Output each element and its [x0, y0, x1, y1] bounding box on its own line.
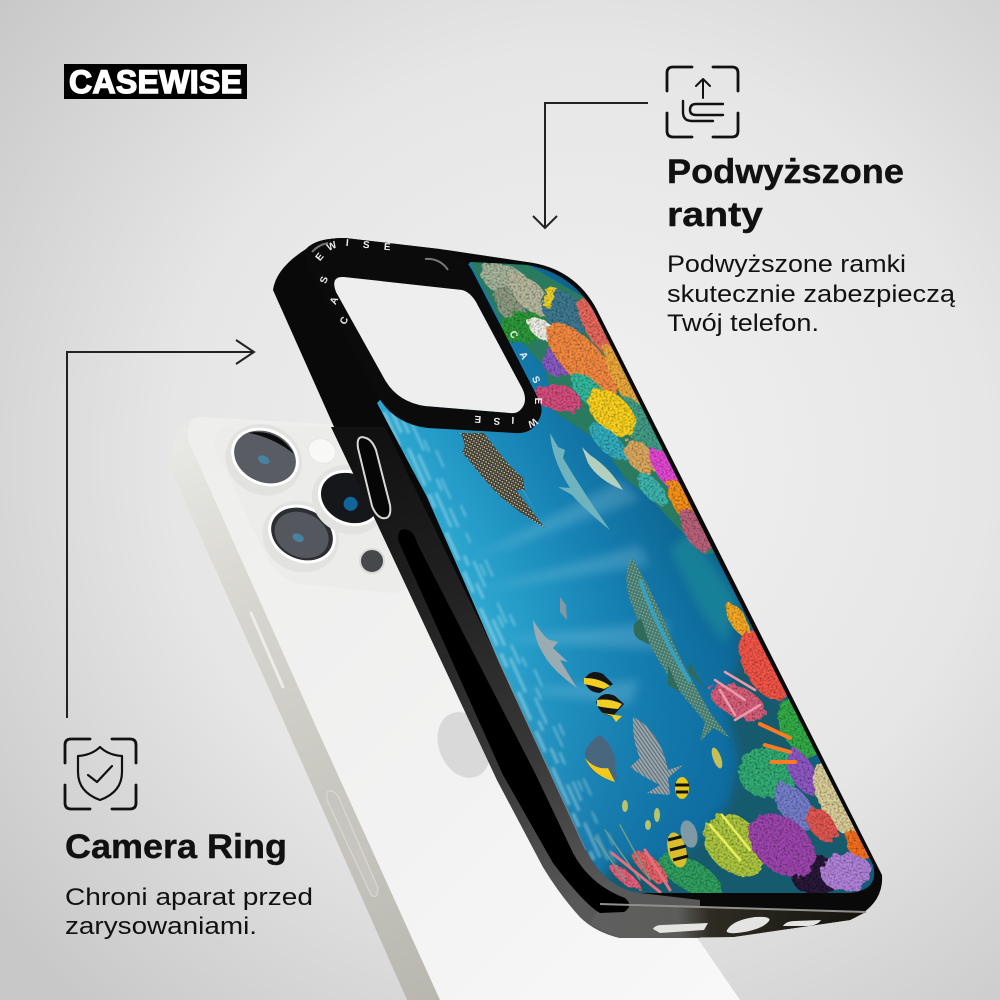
reef faint teal	[670, 530, 738, 645]
reef base band	[470, 262, 720, 555]
yellow striped fish pair	[584, 672, 624, 722]
screen ocean artwork	[377, 262, 874, 893]
side slot cut-out	[398, 529, 629, 913]
ring lettering: C	[507, 329, 520, 341]
striped grey fish	[630, 717, 683, 795]
heading: camera ring: Camera Ring	[65, 828, 287, 866]
description: camera ring: Chroni aparat przed	[65, 884, 313, 911]
protective phone case	[273, 238, 900, 938]
window behind ring	[334, 277, 525, 413]
silver fish	[582, 447, 623, 490]
description: camera ring	[65, 884, 313, 940]
small grey fish	[533, 620, 577, 688]
yellow grey fish	[585, 735, 618, 782]
spotted fish	[460, 433, 545, 528]
large green fish	[626, 558, 730, 742]
lens top	[214, 412, 314, 508]
charging port holes	[653, 917, 821, 933]
ring lettering: W	[525, 415, 539, 430]
arrow to camera ring	[67, 340, 254, 718]
slender teal fish	[550, 433, 610, 530]
description: raised edges: Podwyższone ramki	[667, 251, 906, 278]
brand logo: CASEWISE	[69, 64, 242, 100]
ring lettering: W	[325, 240, 339, 254]
heading: raised edges	[667, 153, 904, 234]
camera ring	[305, 238, 543, 433]
case side grey band	[331, 427, 700, 938]
flash	[304, 434, 340, 468]
ring lettering: E	[532, 398, 543, 405]
description: raised edges	[667, 251, 956, 337]
volume button	[358, 437, 390, 518]
icon: camera ring shield	[65, 739, 136, 809]
lens right	[300, 453, 398, 547]
icon: raised edges	[667, 67, 738, 137]
sensor	[360, 549, 384, 573]
case body	[273, 238, 882, 938]
ring lettering	[314, 238, 543, 430]
ring lettering: S	[362, 240, 370, 251]
phone back face	[172, 417, 740, 1000]
ring lettering: I	[511, 414, 514, 425]
bezel highlight	[432, 505, 586, 850]
reef base band lower	[602, 630, 874, 893]
heading: raised edges: Podwyższone	[667, 153, 904, 191]
water ripples	[384, 412, 620, 866]
ring lettering: E	[383, 242, 391, 253]
ring lettering: A	[517, 350, 530, 362]
phone side stripe	[172, 418, 440, 1000]
tiny fish	[560, 597, 567, 620]
ring lettering: S	[493, 415, 500, 426]
lower lip highlight	[600, 904, 866, 912]
ring lip highlight	[312, 243, 448, 270]
white iPhone behind the case	[172, 412, 740, 1000]
ring lettering: S	[529, 375, 542, 386]
coral branches	[595, 672, 795, 892]
heading: raised edges: ranty	[667, 196, 763, 234]
arrow to raised edges	[533, 103, 648, 228]
side buttons	[251, 613, 283, 687]
description: camera ring: zarysowaniami.	[65, 913, 257, 940]
ring lettering: I	[345, 238, 349, 249]
ring lettering: S	[318, 275, 331, 285]
ring lettering: E	[474, 413, 482, 424]
coral reef bottom	[606, 600, 875, 906]
ring lettering: E	[314, 251, 327, 263]
camera plateau	[214, 424, 408, 593]
light rays	[470, 480, 670, 705]
description: raised edges: skutecznie zabezpieczą	[667, 281, 956, 308]
case foot	[590, 905, 866, 938]
apple logo	[428, 704, 500, 786]
ring lettering: A	[328, 295, 341, 307]
side power button	[327, 791, 378, 896]
description: raised edges: Twój telefon.	[667, 310, 819, 337]
lens bottom	[251, 489, 351, 585]
ring lettering: C	[338, 315, 351, 327]
coral reef top	[475, 255, 717, 556]
small yellow fish group	[622, 746, 725, 870]
